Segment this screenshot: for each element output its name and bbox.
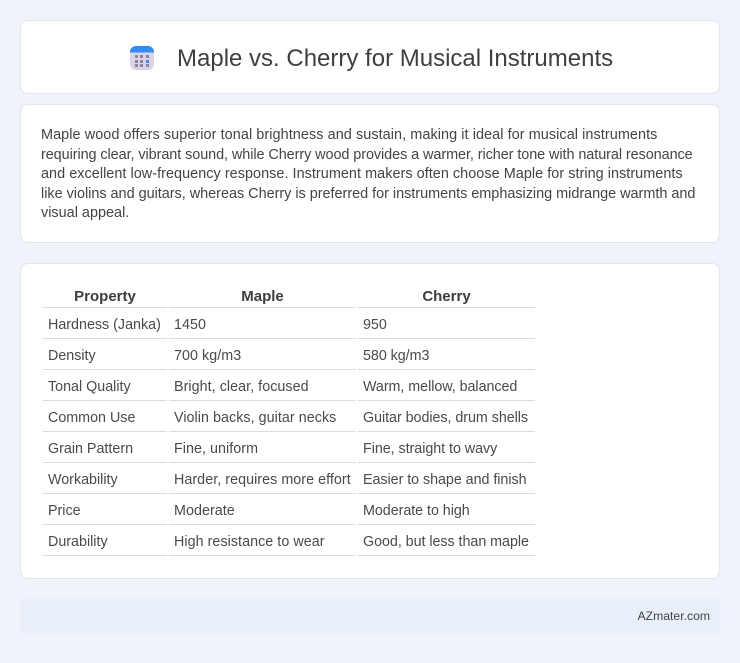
comparison table: Price bbox=[48, 503, 81, 519]
comparison table: Density bbox=[48, 348, 96, 364]
comparison table: Good, but less than maple bbox=[363, 534, 529, 550]
comparison table: Workability bbox=[48, 472, 118, 488]
footer credit: AZmater.com bbox=[638, 609, 710, 623]
comparison table: Bright, clear, focused bbox=[174, 379, 309, 395]
comparison table: Fine, straight to wavy bbox=[363, 441, 497, 457]
comparison table: Tonal Quality bbox=[48, 379, 131, 395]
panel: summary text bbox=[20, 104, 720, 243]
title: Maple vs. Cherry for Musical Instruments bbox=[177, 45, 613, 72]
comparison table: Easier to shape and finish bbox=[363, 472, 526, 488]
comparison table: Warm, mellow, balanced bbox=[363, 379, 517, 395]
comparison table: High resistance to wear bbox=[174, 534, 325, 550]
panel: title card bbox=[20, 20, 720, 94]
icon: calendar bbox=[130, 46, 154, 70]
comparison table: 700 kg/m3 bbox=[174, 348, 241, 364]
summary paragraph: like violins and guitars, whereas Cherry is preferred for instruments emphasizing midrange warmth and bbox=[41, 186, 695, 202]
summary paragraph bbox=[41, 127, 695, 221]
comparison table: 950 bbox=[363, 317, 387, 333]
header: Property: Property bbox=[74, 288, 136, 305]
summary paragraph: visual appeal. bbox=[41, 205, 129, 221]
header: Maple: Maple bbox=[241, 288, 284, 305]
comparison table: Moderate bbox=[174, 503, 235, 519]
comparison table: 1450 bbox=[174, 317, 206, 333]
comparison table: Violin backs, guitar necks bbox=[174, 410, 336, 426]
comparison table: Durability bbox=[48, 534, 108, 550]
comparison table: Harder, requires more effort bbox=[174, 472, 351, 488]
summary paragraph: and excellent low-frequency response. Instrument makers often choose Maple for string instruments bbox=[41, 166, 683, 182]
comparison table: Grain Pattern bbox=[48, 441, 133, 457]
comparison table: Hardness (Janka) bbox=[48, 317, 161, 333]
summary paragraph: Maple wood offers superior tonal brightness and sustain, making it ideal for musical instruments bbox=[41, 127, 657, 143]
summary paragraph: requiring clear, vibrant sound, while Cherry wood provides a warmer, richer tone with natural resonance bbox=[41, 147, 693, 163]
comparison table: Moderate to high bbox=[363, 503, 470, 519]
comparison table: 580 kg/m3 bbox=[363, 348, 429, 364]
footer bar bbox=[20, 599, 720, 633]
comparison table: Guitar bodies, drum shells bbox=[363, 410, 528, 426]
comparison table: Common Use bbox=[48, 410, 135, 426]
panel: comparison table bbox=[20, 263, 720, 579]
comparison table bbox=[43, 288, 535, 556]
comparison table: Fine, uniform bbox=[174, 441, 258, 457]
header: Cherry: Cherry bbox=[422, 288, 471, 305]
